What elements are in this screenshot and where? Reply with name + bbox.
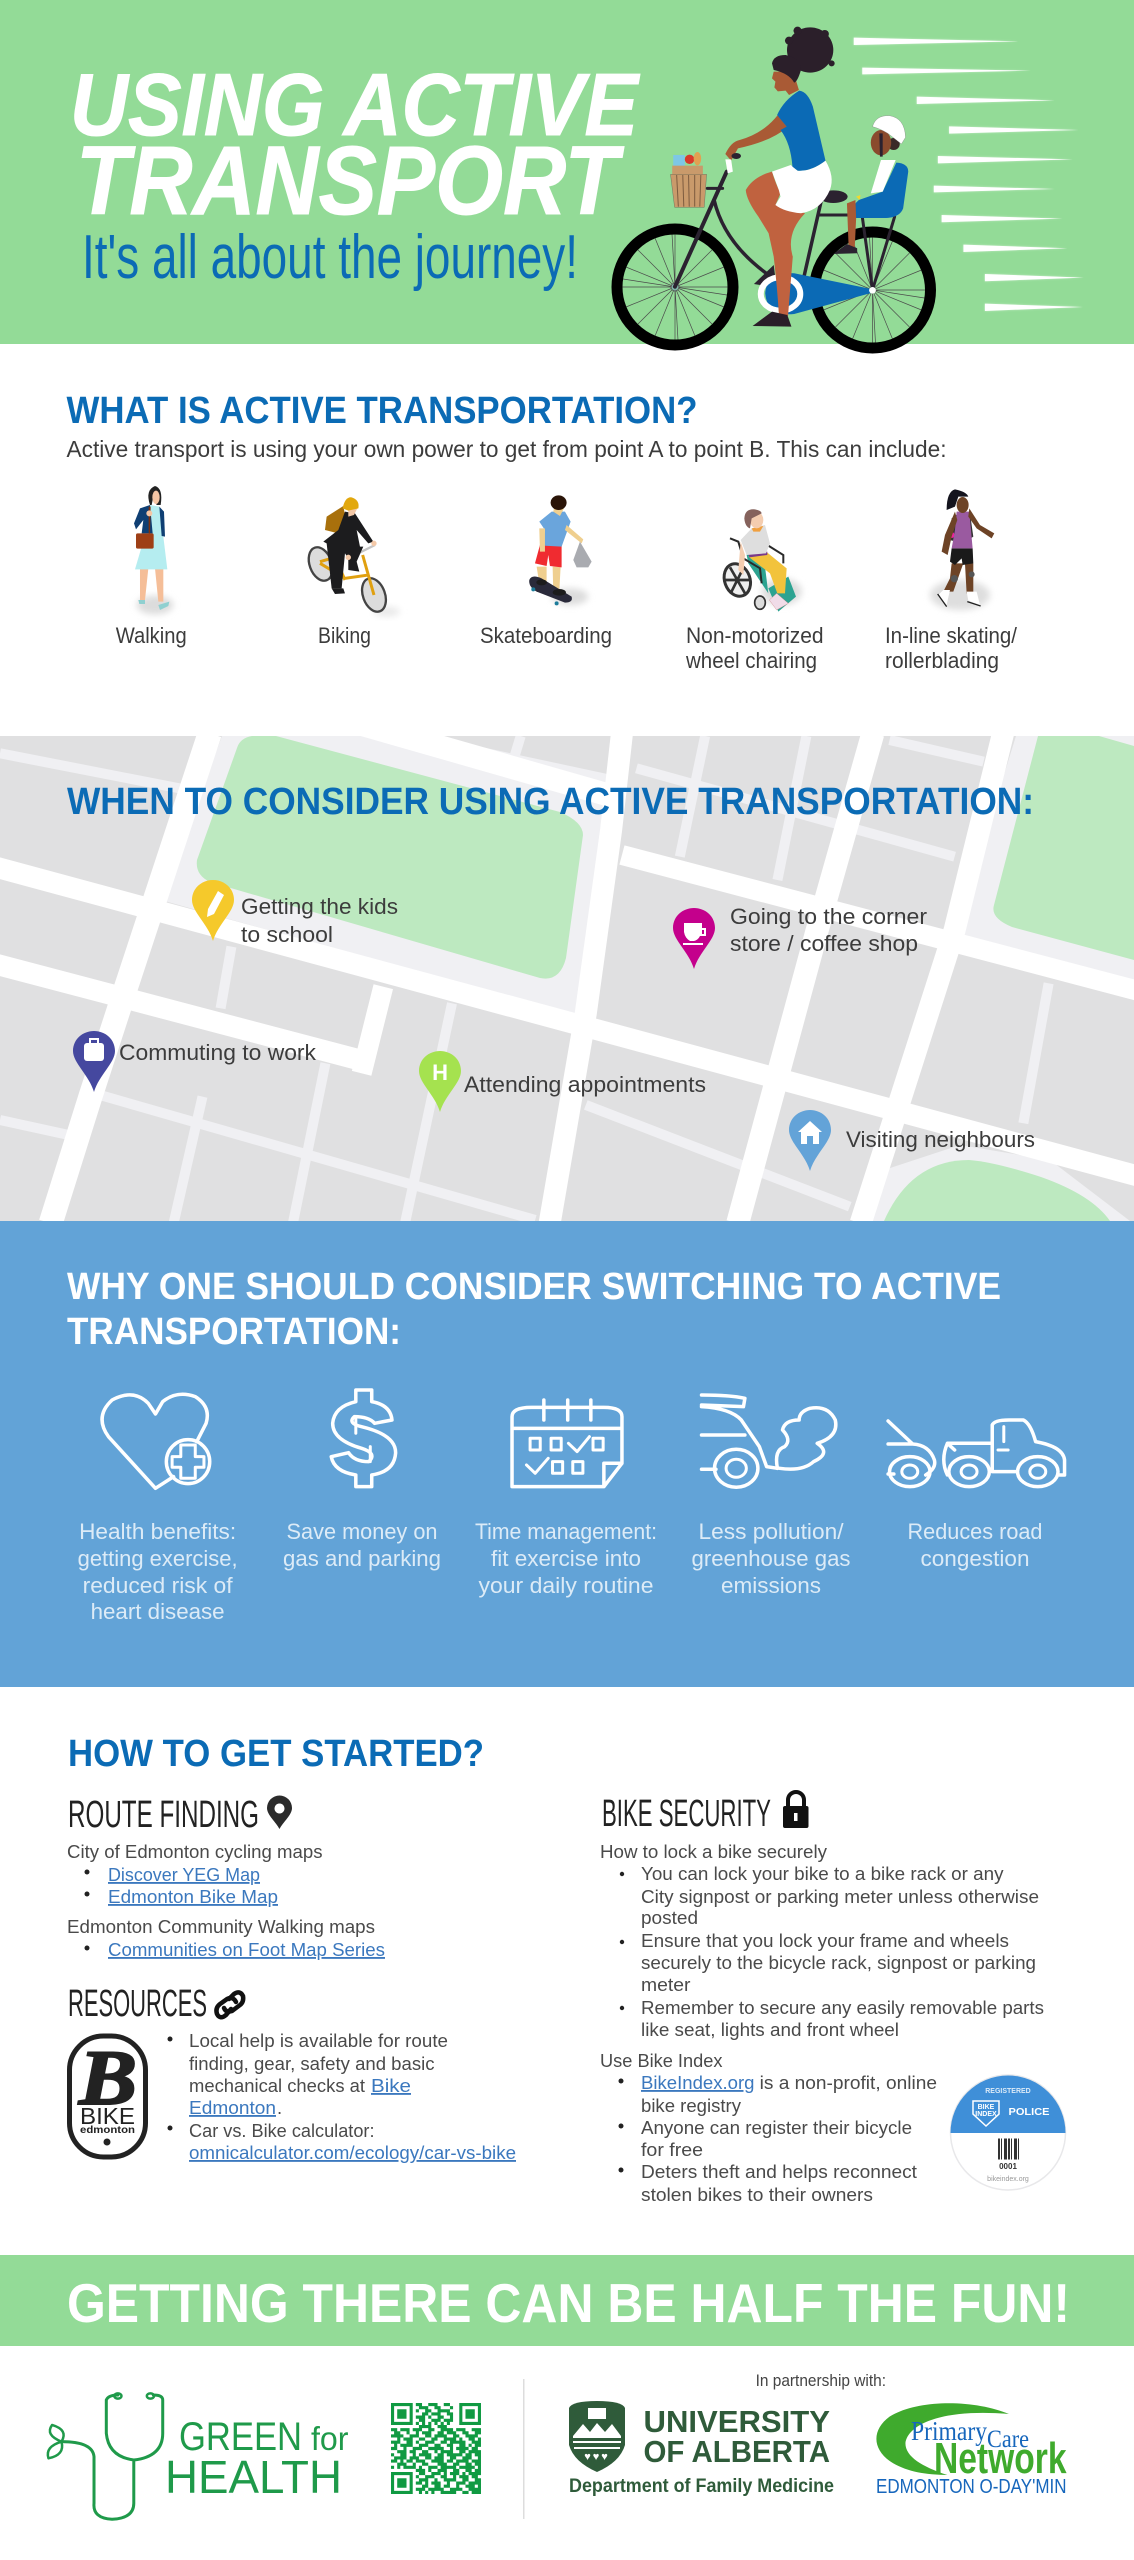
text: bike index: Use Bike Index [600, 2050, 723, 2071]
map pin: work [73, 1031, 115, 1092]
figure labels: Non-motorized [686, 623, 824, 648]
sticker: Bike Index registration: BIKE [978, 2104, 995, 2111]
text: how to lock: securely to the bicycle rack, signpost or parking [641, 1952, 1036, 1973]
label: school: Getting the kids [241, 894, 398, 919]
logo: University of Alberta: ♥♥♥ [584, 2451, 610, 2463]
logo: Green for Health: GREEN [179, 2415, 302, 2459]
benefit: congestion: Reduces road [908, 1519, 1042, 1544]
intro text: Active transport is using your own power to get from point A to point B. This can include: [66, 436, 946, 462]
speed lines [854, 38, 1084, 311]
benefit: health: Health benefits: [79, 1519, 236, 1544]
logo: University of Alberta [569, 2401, 834, 2497]
panel: what is active transportation [66, 390, 1018, 673]
text: bike index: BikeIndex.org [641, 2072, 754, 2093]
map pin: appointments: H [432, 1060, 448, 1085]
panel: route finding [67, 1794, 385, 1960]
text: resource bullets: Edmonton [189, 2097, 276, 2118]
sticker: Bike Index registration: bikeindex.org [987, 2176, 1029, 2183]
map pin: coffee [673, 908, 715, 969]
sticker: Bike Index registration: 0001 [999, 2162, 1017, 2171]
arm [725, 115, 787, 161]
heading: WHY ONE SHOULD CONSIDER SWITCHING TO ACTIVE [67, 1266, 1001, 1308]
shoe [753, 312, 791, 327]
label: coffee: store / coffee shop [730, 931, 918, 956]
logo: University of Alberta: UNIVERSITY [644, 2404, 830, 2439]
figure: walking [134, 486, 173, 614]
figure: skateboarding [529, 495, 592, 605]
logo: Primary Care Network [876, 2403, 1067, 2498]
shorts [772, 161, 832, 213]
benefit: time: your daily routine [478, 1573, 654, 1598]
logo: Bike Edmonton [70, 2034, 146, 2157]
icon: heart with medical cross [102, 1394, 210, 1488]
benefit: money: gas and parking [283, 1546, 441, 1571]
text: how to lock: meter [641, 1974, 690, 1995]
benefit: time: Time management: [475, 1519, 657, 1544]
text: how to lock: How to lock a bike securely [600, 1841, 828, 1862]
icon: cyclist with child on bicycle [617, 27, 930, 348]
text: resource bullets: finding, gear, safety and basic [189, 2053, 434, 2074]
logo: Green for Health: HEALTH [165, 2451, 342, 2503]
figure labels: Biking [318, 623, 371, 648]
text: cycling maps: City of Edmonton cycling maps [67, 1841, 322, 1862]
label: school [241, 894, 398, 947]
benefit: health: heart disease [91, 1599, 225, 1624]
icon: padlock [783, 1792, 808, 1828]
front wheel [617, 229, 733, 345]
text: how to lock: posted [641, 1907, 698, 1928]
label: neighbours: Visiting neighbours [846, 1127, 1035, 1152]
figure labels [116, 623, 1018, 673]
label: coffee [730, 904, 927, 956]
child head [871, 116, 906, 157]
child seat [853, 163, 908, 218]
child torso and legs [871, 160, 896, 193]
icon: calendar with checks [512, 1400, 622, 1487]
shirt [777, 91, 825, 171]
bicycle frame [675, 172, 895, 290]
logo: Green for Health [48, 2393, 349, 2519]
hand grip [725, 159, 733, 173]
benefit: pollution: emissions [721, 1573, 821, 1598]
figure labels: rollerblading [885, 648, 999, 673]
benefit: health: reduced risk of [83, 1573, 234, 1598]
text: resource bullets: mechanical checks at [189, 2075, 365, 2096]
benefit: time: fit exercise into [491, 1546, 641, 1571]
head [772, 72, 799, 95]
map pin: school [192, 880, 234, 941]
text: walking maps: Edmonton Community Walking maps [67, 1916, 375, 1937]
subtitle: It's all about the journey! [82, 223, 578, 292]
map pin: neighbours [789, 1110, 831, 1171]
benefit: health: getting exercise, [78, 1546, 238, 1571]
QR code [391, 2403, 481, 2494]
label: appointments: Attending appointments [464, 1072, 706, 1097]
icon: car exhaust pollution [702, 1395, 836, 1487]
title: USING ACTIVE [70, 55, 640, 154]
text: bike index: is a non-profit, online [760, 2072, 937, 2093]
text: walking maps [67, 1916, 385, 1960]
benefit: money: Save money on [286, 1519, 438, 1544]
subheading: RESOURCES [68, 1983, 207, 2025]
figure: wheelchair [720, 509, 802, 612]
benefit: congestion [908, 1519, 1042, 1571]
logo: Primary Care Network: Network [934, 2434, 1067, 2483]
icon: location pin [267, 1796, 292, 1829]
chain guard [765, 273, 872, 314]
icon: cars in congestion [888, 1420, 1065, 1487]
text: bike index: Deters theft and helps reconnect [641, 2161, 917, 2182]
text: how to lock: City signpost or parking meter unless otherwise [641, 1886, 1039, 1907]
benefit: pollution: Less pollution/ [698, 1519, 844, 1544]
banner: closing message [0, 2255, 1134, 2346]
heading: WHAT IS ACTIVE TRANSPORTATION? [66, 390, 698, 432]
title [70, 55, 640, 235]
benefit: health [78, 1519, 238, 1624]
subheading: ROUTE FINDING [68, 1794, 259, 1836]
hair [772, 27, 835, 83]
text: in partnership with: In partnership with: [756, 2371, 886, 2390]
logo: Primary Care Network: EDMONTON O-DAY'MIN [876, 2476, 1066, 2498]
text: resource bullets: Car vs. Bike calculator: [189, 2120, 374, 2141]
heading [67, 1266, 1001, 1353]
figure: rollerblading [930, 489, 994, 610]
figure labels: Walking [116, 623, 187, 648]
icon: chain link [216, 1992, 243, 2017]
figure labels: In-line skating/ [885, 623, 1018, 648]
panel: why switch [0, 1221, 1134, 1687]
heading: when to consider: WHEN TO CONSIDER USING ACTIVE TRANSPORTATION: [67, 781, 1034, 823]
text: how to lock: Remember to secure any easily removable parts [641, 1997, 1044, 2018]
figure: biking [304, 497, 400, 616]
logo: Bike Edmonton: B [78, 2034, 137, 2121]
logo: Primary Care Network: Care [987, 2426, 1029, 2453]
text: how to lock: You can lock your bike to a bike rack or any [641, 1863, 1004, 1884]
rider legs [746, 172, 805, 316]
panel: header banner [0, 0, 1134, 348]
text: cycling maps [67, 1841, 322, 1907]
text: resource bullets: Bike [371, 2075, 411, 2096]
logo: Bike Edmonton: edmonton [80, 2125, 135, 2136]
text: resource bullets: . [277, 2097, 282, 2118]
text: bike index: for free [641, 2139, 703, 2160]
basket with groceries [671, 152, 707, 207]
benefit: pollution [692, 1519, 850, 1598]
logo: University of Alberta: OF ALBERTA [644, 2434, 830, 2469]
icon: dollar sign [331, 1390, 396, 1487]
text: bike index: Anyone can register their bicycle [641, 2117, 912, 2138]
rear wheel [814, 232, 930, 348]
label: work: Commuting to work [119, 1040, 317, 1065]
title: TRANSPORT [76, 126, 625, 235]
map pin: appointments [419, 1051, 461, 1112]
text: bike index [600, 2050, 937, 2205]
text: cycling maps: Edmonton Bike Map [108, 1886, 278, 1907]
benefit: pollution: greenhouse gas [692, 1546, 850, 1571]
text: how to lock: Ensure that you lock your frame and wheels [641, 1930, 1009, 1951]
panel: when to consider, street map [0, 721, 1134, 1223]
text: resource bullets: omnicalculator.com/ecology/car-vs-bike [189, 2142, 516, 2163]
label: coffee: Going to the corner [730, 904, 927, 929]
far leg and pedal shoe [754, 265, 775, 285]
benefit: time [475, 1519, 657, 1598]
sticker: Bike Index registration: INDEX [975, 2111, 997, 2118]
heading: TRANSPORTATION: [67, 1311, 401, 1353]
sticker: Bike Index registration [950, 2075, 1066, 2190]
text: bike index: stolen bikes to their owners [641, 2184, 873, 2205]
label: school: to school [241, 922, 333, 947]
subheading: BIKE SECURITY [602, 1793, 771, 1835]
figure labels: wheel chairing [685, 648, 817, 673]
text: cycling maps: Discover YEG Map [108, 1864, 260, 1885]
text: walking maps: Communities on Foot Map Series [108, 1939, 385, 1960]
panel: resources [68, 1983, 516, 2163]
heading: how to get started: HOW TO GET STARTED? [68, 1733, 484, 1775]
sticker: Bike Index registration: POLICE [1008, 2107, 1050, 2118]
logo: Bike Edmonton: BIKE [80, 2103, 135, 2129]
text: resource bullets [168, 2030, 516, 2163]
benefit: money [283, 1519, 441, 1571]
text: resource bullets: Local help is available for route [189, 2030, 448, 2051]
text: bike index: bike registry [641, 2095, 742, 2116]
logo: University of Alberta: Department of Family Medicine [569, 2476, 834, 2497]
saddle [819, 190, 848, 203]
divider line [523, 2379, 524, 2519]
benefit: congestion: congestion [920, 1546, 1030, 1571]
logo: Green for Health: for [311, 2420, 349, 2457]
text: how to lock [600, 1841, 1044, 2040]
figure labels: Skateboarding [480, 623, 612, 648]
sticker: Bike Index registration: REGISTERED [985, 2088, 1031, 2095]
logo: Primary Care Network: Primary [911, 2416, 987, 2446]
text: how to lock: like seat, lights and front wheel [641, 2019, 899, 2040]
panel: bike security [600, 1792, 1066, 2205]
